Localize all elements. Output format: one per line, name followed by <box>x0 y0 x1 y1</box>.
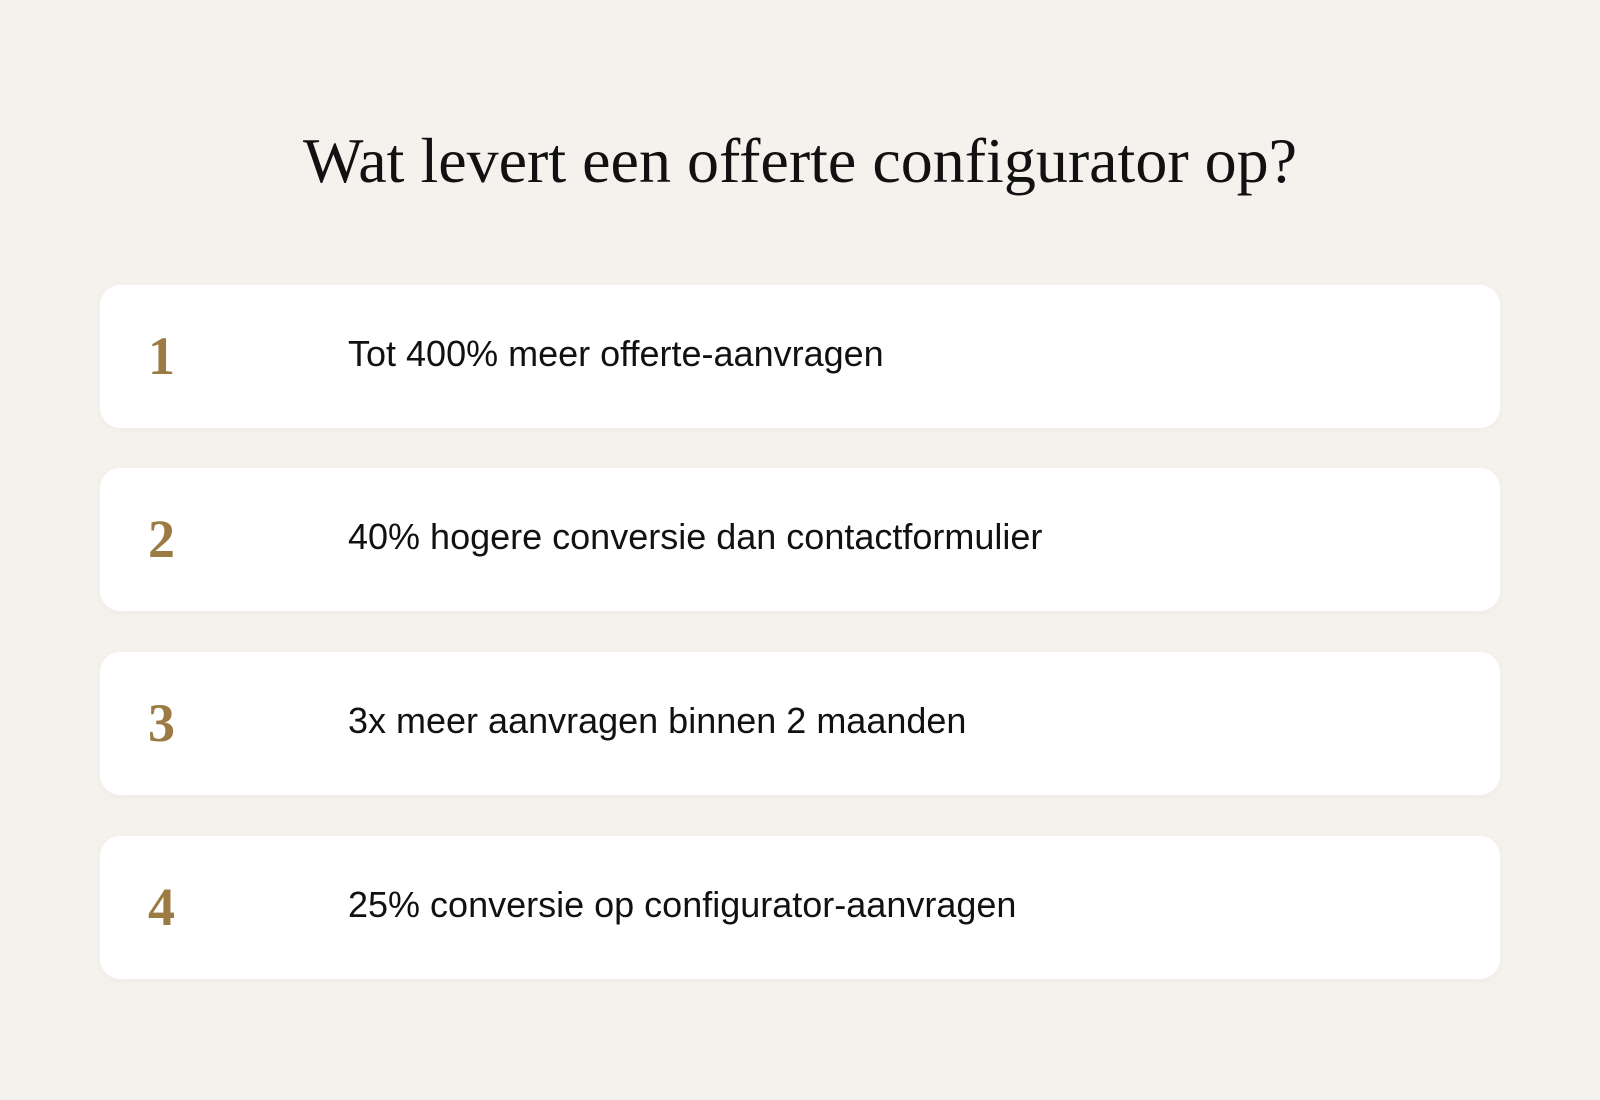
title: Wat levert een offerte configurator op? <box>303 125 1297 196</box>
number 2: 2 <box>148 509 175 569</box>
card 4 <box>100 836 1500 979</box>
card 3 <box>100 652 1500 795</box>
number 4: 4 <box>148 877 175 937</box>
card 1 <box>100 285 1500 428</box>
number 3: 3 <box>148 693 175 753</box>
text 1: Tot 400% meer offerte-aanvragen <box>348 333 884 374</box>
number 1: 1 <box>148 326 175 386</box>
text 3: 3x meer aanvragen binnen 2 maanden <box>348 700 966 741</box>
text 4: 25% conversie op configurator-aanvragen <box>348 884 1016 925</box>
card 2 <box>100 468 1500 611</box>
text 2: 40% hogere conversie dan contactformulier <box>348 516 1042 557</box>
